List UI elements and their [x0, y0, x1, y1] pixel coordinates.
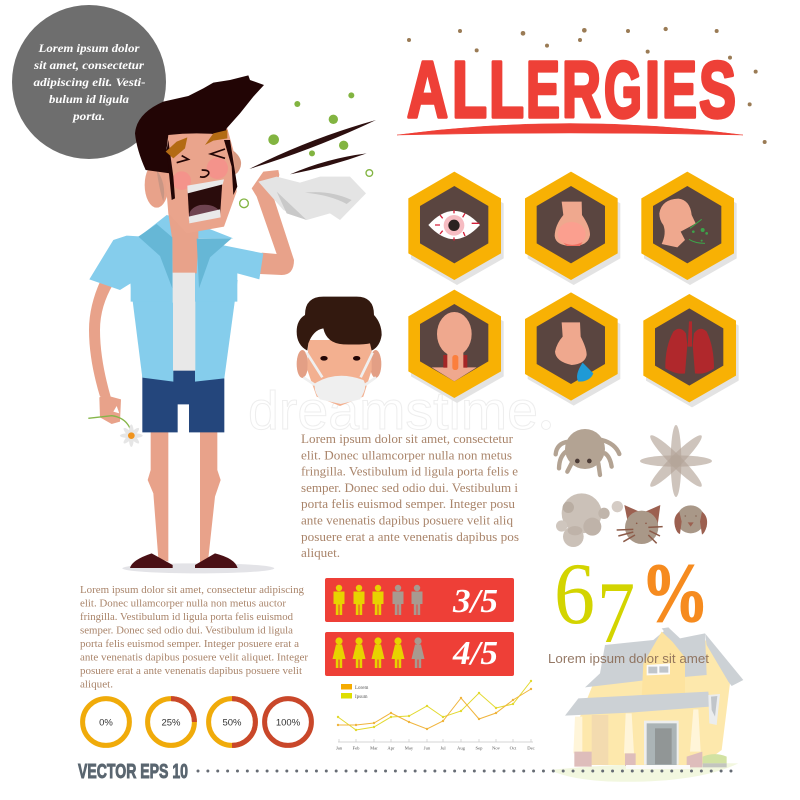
title: I	[645, 45, 660, 134]
icon: lungs	[643, 294, 739, 407]
paragraph: middle: semper. Donec sed odio dui. Vestibulum i	[301, 481, 519, 495]
paragraph: bottom left: posuere erat a ante venenatis dapibus posuere velit	[80, 666, 302, 677]
paragraph: middle: posuere erat a ante venenatis dapibus pos	[301, 530, 519, 544]
donut: 25%	[148, 699, 194, 745]
stat: 67 percent: 6	[554, 546, 595, 643]
paragraph: bottom left: Lorem ipsum dolor sit amet, consectetur adipiscing	[80, 585, 304, 596]
decorative pollen dots	[407, 27, 767, 144]
icon: red nose	[525, 172, 620, 285]
title swoosh	[397, 124, 743, 135]
series: Ipsum	[337, 680, 532, 731]
month labels: Sep	[476, 746, 483, 750]
callout circle: adipiscing elit. Vesti-	[34, 77, 146, 89]
paragraph: bottom left: semper. Donec sed odio dui. Vestibulum id ligula	[80, 626, 293, 636]
icon: cat	[617, 505, 663, 544]
allergen icons	[556, 425, 712, 547]
stat: 67 percent: Lorem ipsum dolor sit amet	[548, 651, 709, 666]
month labels: Dec	[527, 746, 535, 750]
line chart	[336, 680, 535, 750]
title: E	[526, 45, 560, 134]
title: L	[489, 45, 524, 134]
paragraph: middle: elit. Donec ullamcorper nulla non metus	[301, 448, 512, 462]
stat bar: 3/5	[325, 578, 514, 622]
title: R	[562, 45, 601, 134]
donut: 25%: 25%	[161, 718, 181, 728]
paragraph: middle	[301, 432, 519, 560]
stat: 67 percent: 7	[597, 565, 635, 662]
month labels: May	[405, 746, 414, 750]
icon: runny nose	[525, 292, 620, 406]
paragraph: middle: Lorem ipsum dolor sit amet, consectetur	[301, 432, 514, 446]
donut: 100%	[265, 699, 311, 745]
face mask head	[297, 297, 382, 406]
man upper body	[89, 75, 294, 303]
callout circle: sit amet, consectetur	[33, 60, 145, 72]
man lower body	[88, 277, 274, 573]
month labels: Aug	[457, 746, 466, 750]
symptom icons	[408, 172, 739, 407]
icon: pollen flower	[640, 425, 712, 497]
sneezing man illustration	[88, 75, 376, 573]
title: S	[699, 45, 736, 134]
month labels	[336, 746, 535, 750]
title: A	[407, 45, 448, 134]
donut: 50%	[209, 699, 255, 745]
paragraph: middle: aliquet.	[301, 546, 340, 560]
callout circle: Lorem ipsum dolor	[37, 43, 140, 55]
month labels: Jun	[424, 746, 431, 750]
month labels: Apr	[387, 746, 395, 750]
footer label: VECTOR EPS 10	[78, 761, 188, 783]
month labels: Feb	[353, 746, 360, 750]
title: E	[662, 45, 697, 134]
stat bar: 4/5	[325, 632, 514, 676]
title: G	[604, 45, 642, 134]
paragraph: bottom left: elit. Donec ullamcorper nulla non metus auctor	[80, 598, 287, 610]
paragraph: middle: fringilla. Vestibulum id ligula porta felis e	[301, 465, 518, 479]
paragraph: bottom left	[80, 585, 309, 690]
donut: 50%: 50%	[222, 718, 242, 728]
month labels: Oct	[510, 746, 517, 750]
donut: 0%: 0%	[99, 718, 113, 728]
donut: 100%: 100%	[276, 718, 301, 728]
house illustration	[550, 627, 743, 782]
chart legend	[341, 684, 368, 700]
chart legend: Ipsum	[355, 695, 368, 700]
stat bar: 4/5: 4/5	[452, 635, 498, 672]
month labels: Mar	[370, 746, 378, 750]
icon: red eye	[408, 172, 504, 285]
paragraph: bottom left: aliquet.	[80, 680, 113, 690]
callout circle	[12, 5, 166, 159]
icon: sore throat	[408, 290, 504, 403]
stat: 67 percent: %	[641, 547, 709, 640]
icon: dog	[674, 505, 707, 535]
paragraph: bottom left: porta felis euismod semper. Integer posuere erat a	[80, 639, 299, 650]
icon: coughing head	[641, 172, 737, 285]
sneeze particles	[240, 92, 376, 208]
month labels: Jul	[440, 746, 446, 750]
paragraph: bottom left: ante venenatis dapibus posuere velit aliquet. Integer	[80, 652, 309, 664]
month labels: Nov	[492, 746, 501, 750]
donut: 0%	[83, 699, 129, 745]
callout circle: bulum id ligula	[49, 94, 129, 106]
title: L	[452, 45, 487, 134]
chart legend: Lorem	[355, 686, 368, 691]
footer dotted line	[198, 770, 736, 772]
watermark: dreamstime	[248, 381, 538, 441]
callout circle: porta.	[72, 111, 105, 123]
series: Lorem	[337, 688, 532, 730]
month labels: Jan	[336, 746, 343, 750]
paragraph: middle: ante venenatis dapibus posuere velit aliq	[301, 514, 514, 528]
paragraph: middle: porta felis euismod semper. Integer posu	[301, 497, 516, 511]
icon: dust cluster	[556, 493, 623, 547]
tissue	[258, 177, 366, 220]
icon: dust mite	[556, 429, 619, 475]
stat: 67 percent	[548, 546, 709, 666]
stat bar: 3/5: 3/5	[452, 583, 498, 620]
title	[407, 45, 736, 134]
paragraph: bottom left: fringilla. Vestibulum id ligula porta felis euismod	[80, 612, 294, 623]
